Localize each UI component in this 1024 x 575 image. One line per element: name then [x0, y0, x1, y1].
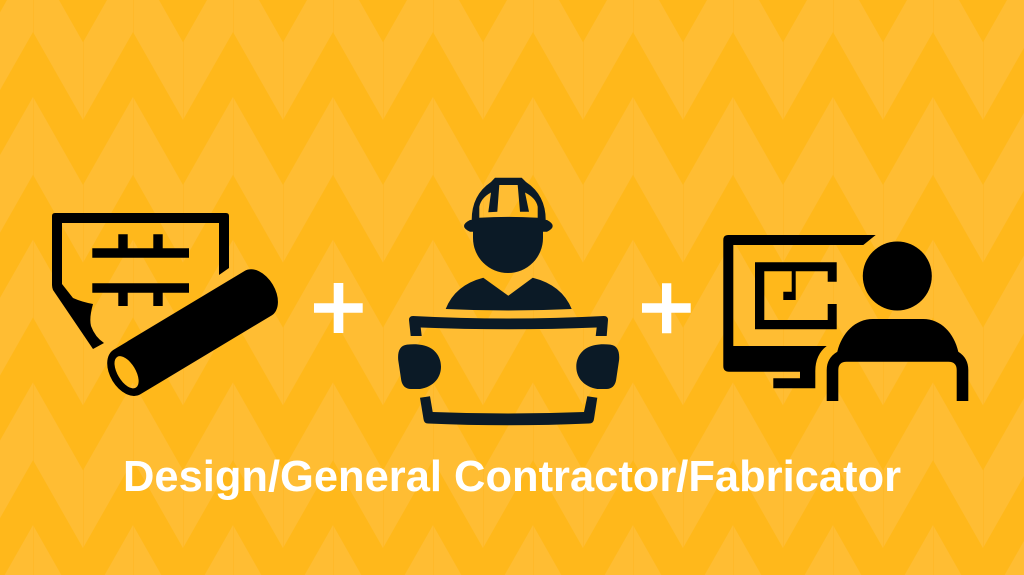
icon: construction worker holding plans — [398, 178, 619, 425]
hat brim — [464, 218, 553, 232]
icon: blueprint sheet and roll — [52, 213, 286, 403]
shoulders — [446, 278, 572, 310]
right hand — [576, 344, 619, 389]
person body — [827, 319, 968, 401]
plan sheet bottom edge — [420, 396, 597, 425]
plus sign 1 — [314, 283, 363, 333]
pipe symbols on sheet — [92, 234, 189, 306]
rolled blueprint — [99, 262, 286, 403]
plus sign 2 — [642, 283, 691, 333]
caption: Design/General Contractor/Fabricator — [123, 453, 901, 501]
left hand — [398, 344, 441, 389]
floor plan on screen — [755, 262, 837, 329]
monitor — [723, 235, 876, 388]
hard hat — [472, 178, 546, 222]
icon: person at computer with floor plan — [723, 235, 968, 401]
plan sheet top edge — [409, 316, 608, 336]
blueprint sheet outline — [52, 213, 229, 349]
person head — [863, 242, 932, 310]
head — [473, 218, 543, 273]
